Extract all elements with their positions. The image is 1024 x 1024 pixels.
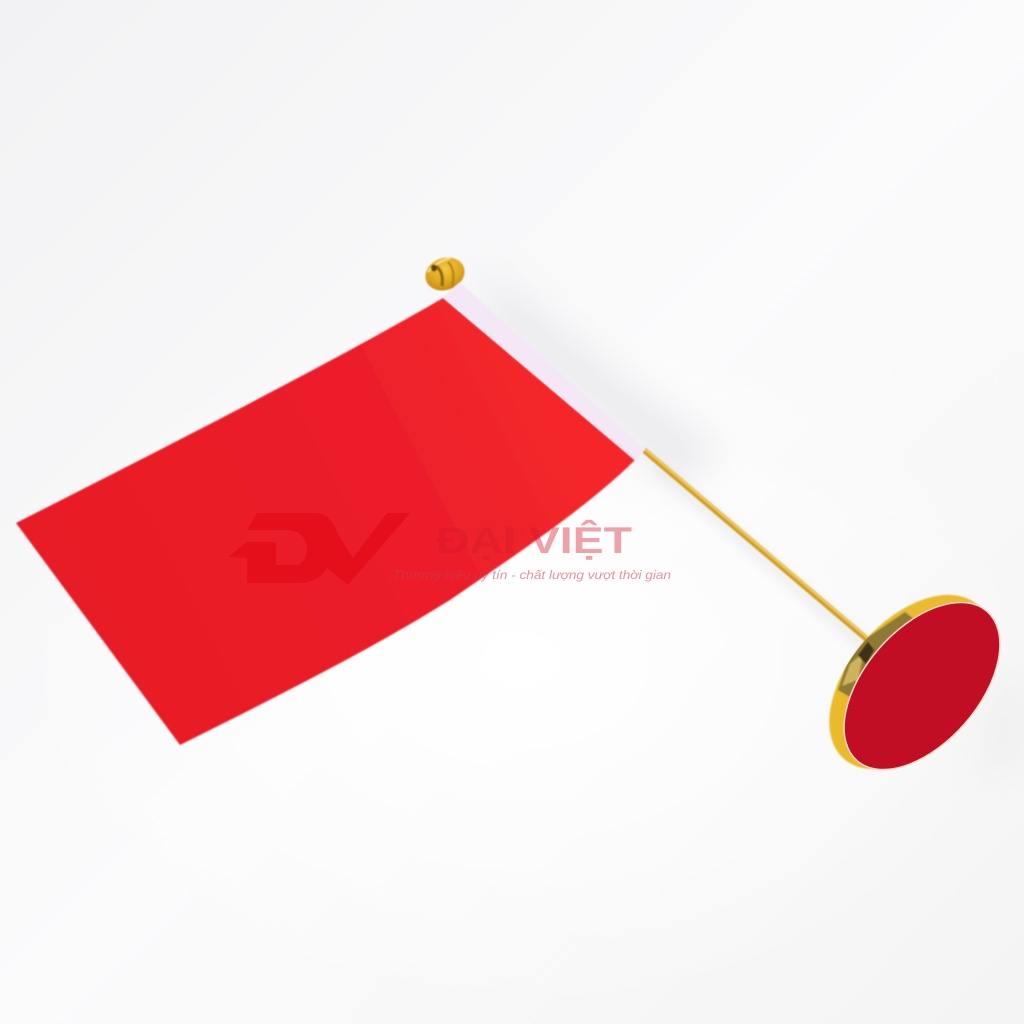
base: red felt: [814, 574, 1024, 798]
flag: white sleeve: [443, 282, 645, 462]
tagline: Thương hiệu uy tín - chất lượng vượt thời gian: [393, 568, 671, 582]
gold pole: [644, 449, 869, 640]
watermark logo: [228, 513, 671, 585]
base: rim reflection: [838, 612, 915, 700]
gold finial: [421, 252, 469, 296]
base: gold rim: [797, 564, 1024, 800]
product photo: red desk flag on gold stand: [15, 256, 1001, 770]
logo mark DV: [228, 513, 410, 585]
brand name: ĐẠI VIỆT: [436, 519, 632, 561]
stand base: [828, 594, 1001, 770]
flag: red cloth: [16, 298, 635, 745]
flag shadow on the surface: [475, 262, 1024, 775]
